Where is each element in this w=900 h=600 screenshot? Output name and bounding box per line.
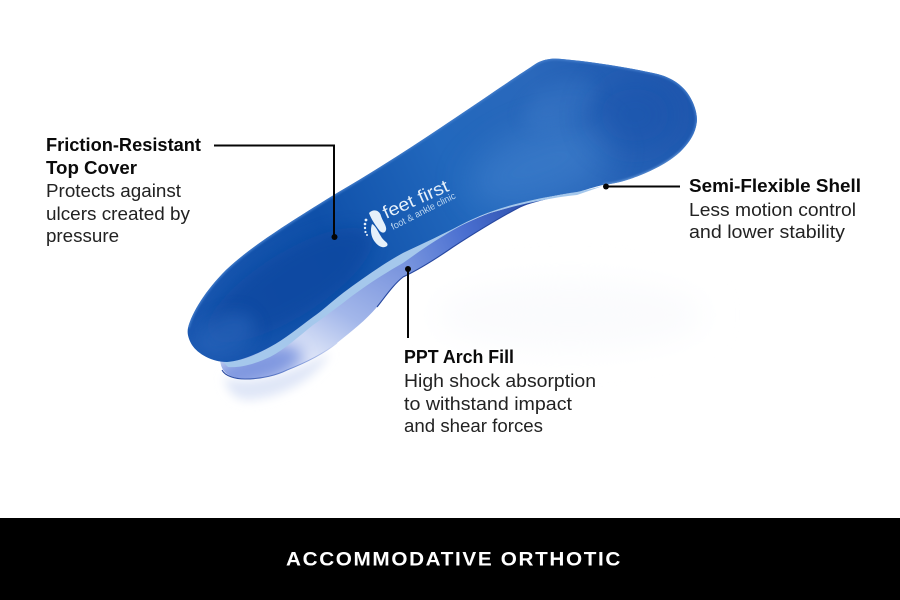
title banner — [0, 518, 900, 600]
faint reflection — [435, 281, 705, 349]
logo: feet first — [364, 176, 458, 247]
arch fill: PPT layer — [220, 245, 420, 379]
text block: friction-resistant top cover: pressure — [46, 226, 119, 246]
top cover — [188, 59, 697, 362]
orthotic insole — [188, 59, 697, 401]
text block: friction-resistant top cover: ulcers created by — [46, 204, 190, 224]
title: ACCOMMODATIVE ORTHOTIC — [286, 550, 622, 570]
text block: friction-resistant top cover — [46, 135, 201, 246]
text block: PPT arch fill — [404, 347, 596, 436]
text block: PPT arch fill: High shock absorption — [404, 371, 596, 391]
text block: semi-flexible shell: and lower stability — [689, 222, 845, 242]
logo tagline: foot & ankle clinic — [389, 191, 458, 233]
light middle stripe — [222, 186, 603, 367]
text block: friction-resistant top cover: Top Cover — [46, 158, 137, 178]
heel shadow — [224, 352, 330, 400]
arch heel tint — [220, 338, 311, 378]
text block: friction-resistant top cover: Friction-Resistant — [46, 135, 201, 155]
callout leader: arch fill — [405, 266, 411, 338]
text block: friction-resistant top cover: Protects against — [46, 181, 181, 201]
callout leader: shell — [603, 184, 680, 190]
top cover shading — [188, 59, 697, 367]
callout leader: top cover — [214, 146, 338, 240]
bottom shell edge: arch — [377, 193, 577, 307]
icon: feet — [364, 210, 388, 247]
text block: semi-flexible shell: Semi-Flexible Shell — [689, 176, 861, 196]
text block: semi-flexible shell — [689, 176, 861, 242]
text block: PPT arch fill: to withstand impact — [404, 394, 572, 414]
text block: semi-flexible shell: Less motion control — [689, 200, 856, 220]
arch fill right side — [400, 193, 577, 277]
text block: PPT arch fill: PPT Arch Fill — [404, 347, 514, 367]
logo wordmark: feet first — [379, 176, 452, 223]
text block: PPT arch fill: and shear forces — [404, 416, 543, 436]
bottom shell edge: heel — [222, 343, 337, 379]
